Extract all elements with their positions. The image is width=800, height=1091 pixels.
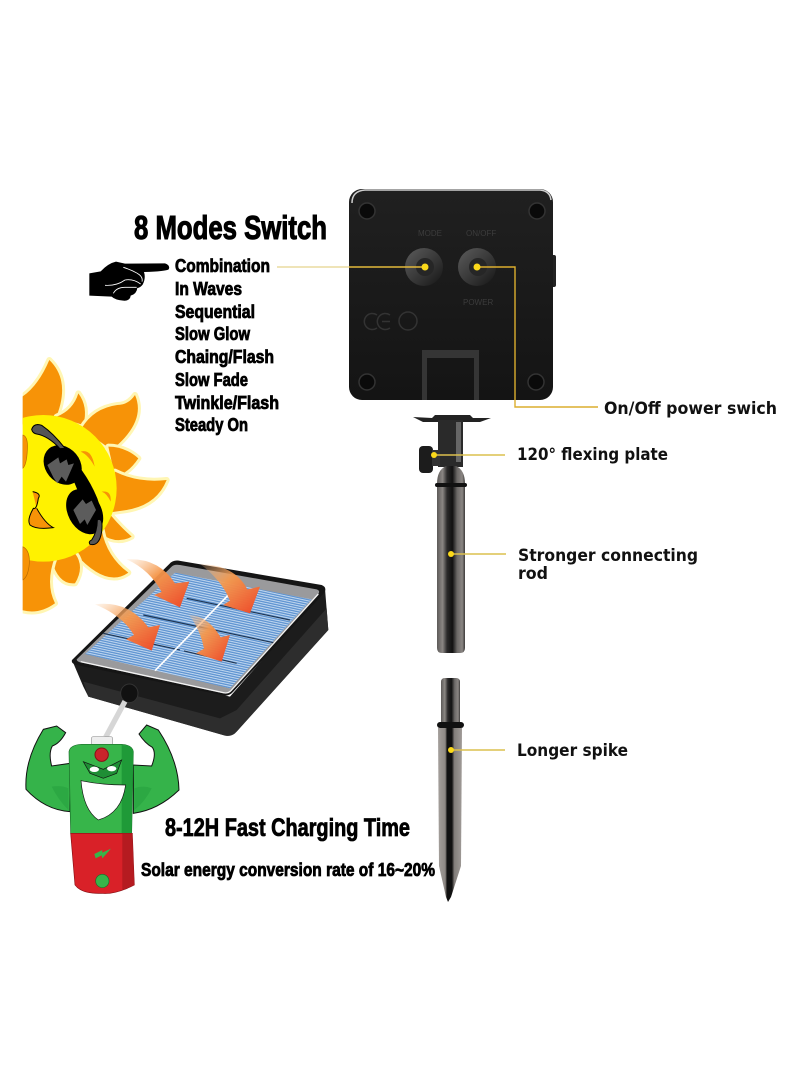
plus terminal: [95, 748, 108, 761]
panel body: [72, 588, 328, 736]
panel centre divider: [155, 595, 228, 671]
box housing: [349, 189, 553, 400]
rod: [437, 487, 465, 653]
label: flexing plate: 120° flexing plate: [517, 445, 668, 465]
heading: fast charging time: 8-12H Fast Charging Time: [165, 814, 410, 842]
list of lighting modes: Combination: [175, 256, 270, 276]
sunlight arrows: [127, 559, 189, 607]
bracket: [438, 420, 463, 467]
list of lighting modes: Sequential: [175, 302, 255, 322]
cheek and mouth marks: [81, 451, 111, 502]
solar panel: [72, 559, 328, 737]
label: connecting rod: Stronger connecting: [518, 546, 698, 566]
flexing plate and connecting rod: [413, 415, 491, 653]
list of lighting modes: [175, 256, 279, 435]
mode and power labels: MODE: [418, 229, 442, 238]
list of lighting modes: Twinkle/Flash: [175, 393, 279, 413]
battery green body: [69, 744, 133, 833]
label: connecting rod: rod: [518, 564, 548, 584]
bracket notch: [422, 350, 479, 400]
battery red body: [71, 833, 134, 894]
side switch: [551, 255, 556, 287]
list of lighting modes: Slow Fade: [175, 370, 248, 390]
label: longer spike: Longer spike: [517, 741, 628, 761]
blue solar cells: [85, 573, 312, 688]
title: 8 Modes Switch: 8 Modes Switch: [134, 209, 327, 246]
spike flange: [437, 722, 464, 728]
battery cap: [91, 737, 113, 746]
minus terminal: [96, 874, 109, 888]
callout lines and dots: [277, 264, 598, 753]
face: [81, 781, 126, 820]
arm shading: [52, 786, 152, 810]
icon: sun with sunglasses: [0, 360, 167, 612]
sun face: [22, 415, 117, 562]
list of lighting modes: Chaing/Flash: [175, 347, 274, 367]
panel grey frame: [77, 565, 319, 693]
spike blade: [438, 728, 462, 902]
panel top rim: [72, 561, 325, 696]
adjusting knob: [419, 446, 433, 473]
list of lighting modes: Steady On: [175, 415, 248, 435]
battery mascot: [26, 725, 179, 894]
certification marks: [364, 312, 417, 330]
knob: mode: [405, 248, 443, 286]
mode and power labels: POWER: [463, 298, 493, 307]
spike top: [441, 678, 460, 723]
spike: [437, 678, 464, 902]
label: power switch: On/Off power swich: [604, 399, 777, 419]
knob: power: [458, 248, 496, 286]
infographic canvas: [22, 189, 776, 902]
rod neck: [437, 466, 465, 484]
lightning icon: [94, 849, 111, 858]
solar controller box: [349, 189, 556, 400]
mode and power labels: [418, 229, 496, 307]
sun flames: [17, 360, 167, 612]
text: solar conversion rate: Solar energy conversion rate of 16~20%: [141, 860, 435, 880]
arms: [26, 726, 70, 812]
rod collar: [435, 483, 467, 487]
cable: [103, 700, 127, 737]
list of lighting modes: Slow Glow: [175, 324, 251, 344]
screws: [359, 203, 545, 390]
power cable socket: [121, 684, 138, 703]
label: connecting rod: [518, 546, 698, 584]
sunglasses: [44, 446, 104, 534]
list of lighting modes: In Waves: [175, 279, 242, 299]
plate: [413, 415, 491, 422]
icon: pointing hand: [89, 262, 169, 301]
mode and power labels: ON/OFF: [466, 229, 496, 238]
